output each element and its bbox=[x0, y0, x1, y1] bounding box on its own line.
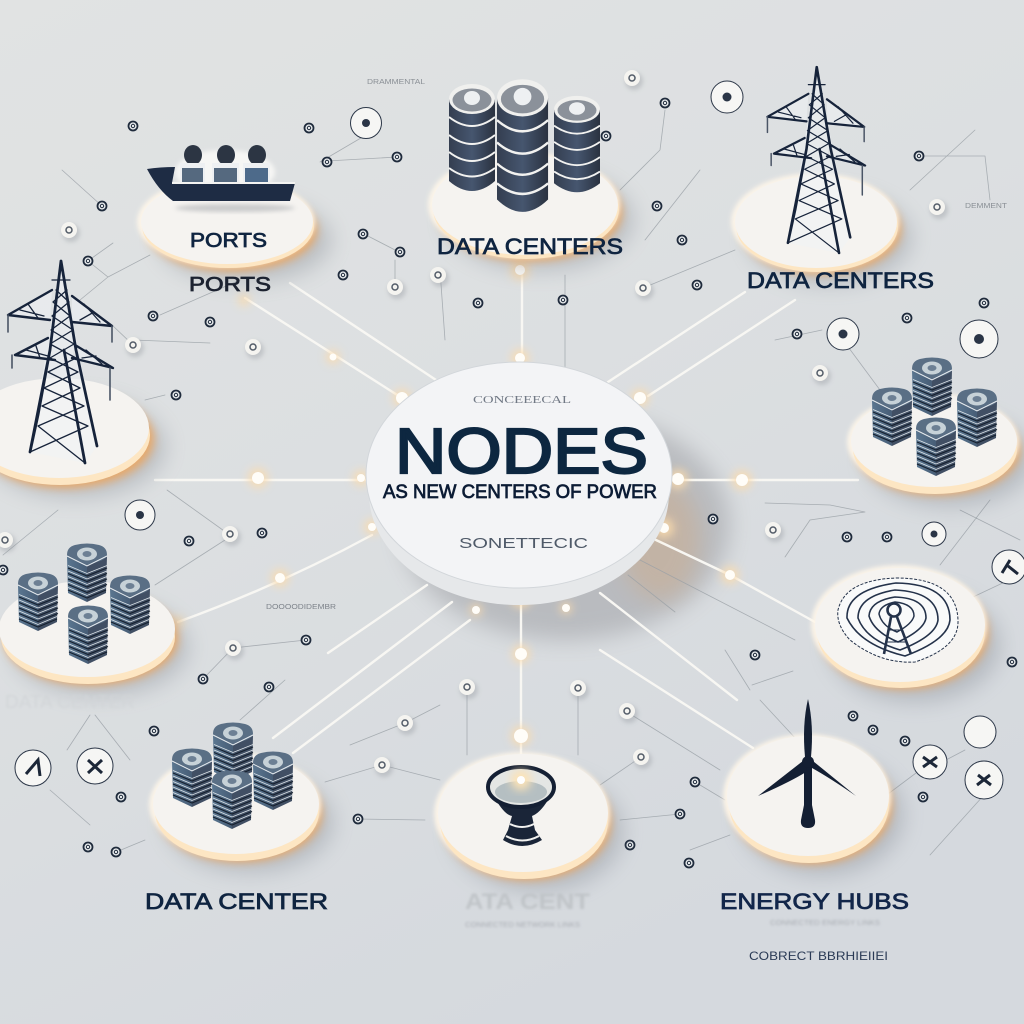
central disc rim bbox=[369, 381, 669, 605]
central disc shadow bbox=[400, 410, 730, 640]
faint caption: bottom centre: CONNECTED NETWORK LINKS bbox=[465, 922, 580, 929]
faint caption: right: DEMMENT bbox=[965, 203, 1008, 210]
faint caption: top: DRAMMENTAL bbox=[367, 79, 425, 86]
label: ports below disc: PORTS bbox=[189, 274, 271, 296]
bright spokes bbox=[155, 268, 858, 755]
label: faded data center: ATA CENT bbox=[465, 889, 591, 914]
label: ports on disc: PORTS bbox=[190, 230, 267, 252]
icon: signal tower with rings bbox=[838, 578, 958, 662]
central subtitle: AS NEW CENTERS OF POWER bbox=[383, 482, 657, 503]
disc: servers right bbox=[847, 393, 1024, 506]
icon: servers right bbox=[872, 358, 997, 476]
label: data center bottom: DATA CENTER bbox=[145, 889, 328, 914]
central title: NODES bbox=[395, 415, 648, 487]
central disc face bbox=[366, 362, 672, 588]
disc: transmission tower left bbox=[0, 378, 165, 497]
label: energy hubs: ENERGY HUBS bbox=[720, 889, 909, 914]
glowing connection points bbox=[172, 260, 752, 746]
label: data centers top: DATA CENTERS bbox=[437, 234, 623, 259]
disc: satellite dish bbox=[434, 752, 623, 891]
icon: wind turbine bbox=[758, 699, 856, 828]
thin gray links bbox=[3, 110, 1020, 855]
faint caption: bottom right: CONNECTED ENERGY LINKS bbox=[770, 920, 880, 927]
label: correct caption: COBRECT BBRHIEIIEI bbox=[749, 949, 888, 963]
central disc bbox=[366, 362, 672, 605]
label: data centers right: DATA CENTERS bbox=[747, 268, 934, 293]
disc: signal tower bbox=[811, 565, 1000, 702]
icon: servers bottom bbox=[172, 722, 293, 829]
icon: database cylinders bbox=[449, 79, 600, 212]
icon: servers left bbox=[18, 544, 150, 664]
icon: cargo ship bbox=[147, 145, 295, 212]
central lower text: SONETTECIC bbox=[459, 535, 588, 552]
disc: ports bbox=[137, 177, 331, 282]
disc: energy hubs bbox=[723, 734, 903, 875]
faint caption: left: DOOOODIDEMBR bbox=[266, 604, 336, 611]
disc: data center bottom bbox=[149, 752, 333, 872]
disc: transmission tower right bbox=[731, 173, 911, 284]
faint caption: far left: DATA CENTER bbox=[5, 692, 135, 712]
network connector lines bbox=[3, 110, 1020, 855]
icon: satellite dish bbox=[488, 767, 554, 846]
icon: transmission tower right bbox=[767, 67, 865, 253]
icon: transmission tower left bbox=[8, 261, 113, 463]
disc: data centers top bbox=[428, 152, 633, 270]
central eyebrow text: CONCEEECAL bbox=[473, 395, 571, 406]
disc: servers left bbox=[0, 581, 188, 695]
small scattered network nodes bbox=[0, 70, 1024, 868]
